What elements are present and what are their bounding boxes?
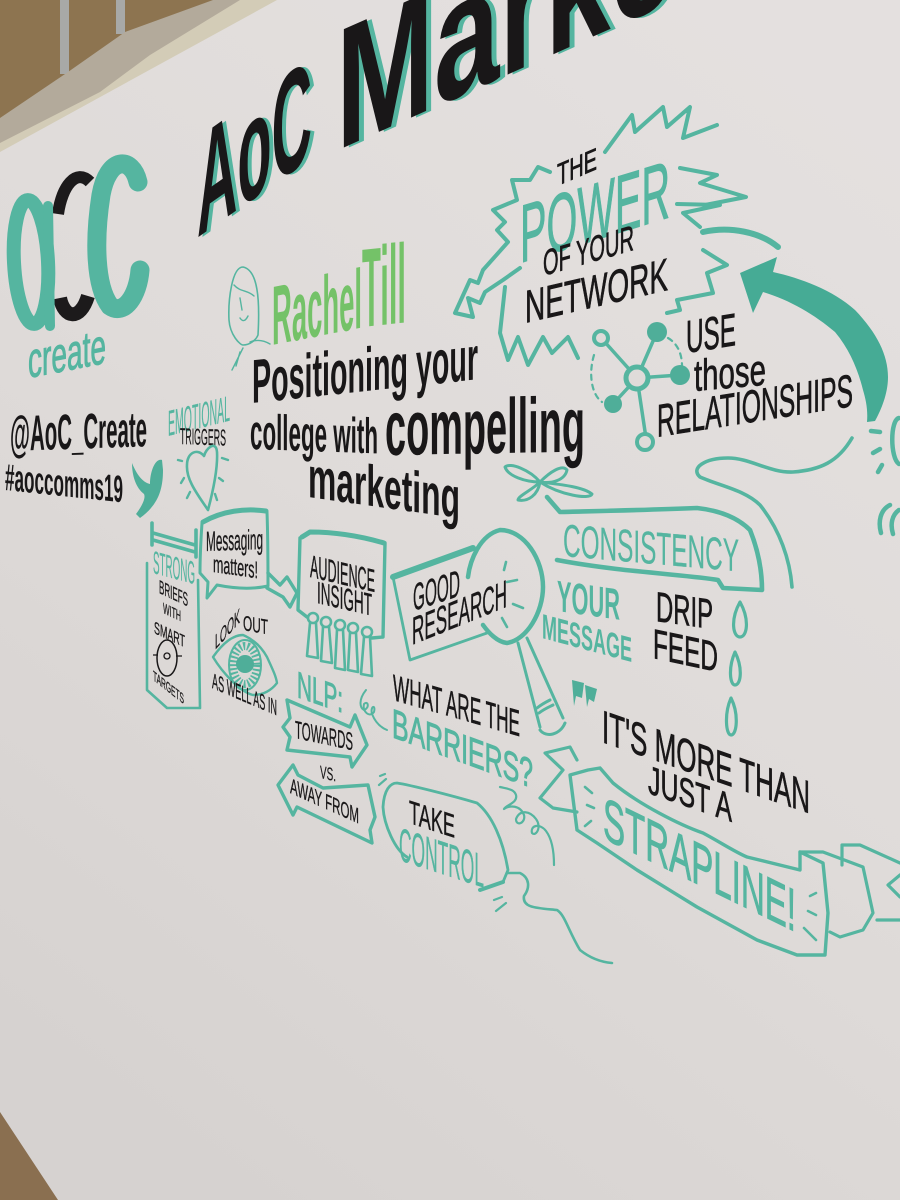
doodle loops right [500, 787, 554, 865]
power of your network burst: OF YOUR [543, 218, 634, 284]
panel: look out eye [212, 603, 277, 720]
arrow: towards: TOWARDS [295, 716, 353, 756]
panel: consistency banner [542, 497, 762, 735]
icon: water drops [726, 602, 746, 735]
logo letter c [97, 164, 140, 309]
callout: take control: TAKE [409, 794, 455, 846]
use those relationships [657, 303, 853, 447]
callout: take control [379, 774, 612, 963]
text: Messaging [206, 524, 263, 557]
panel: audience insight: INSIGHT [317, 575, 372, 623]
wall and window behind the paper [0, 0, 290, 170]
quote: it's more than just a strapline: JUST A [648, 757, 732, 831]
power of your network burst: POWER [520, 143, 670, 281]
arrow: towards [283, 700, 367, 767]
logo letter a [11, 199, 51, 326]
callout: messaging matters: matters! [213, 551, 258, 584]
sign post [152, 523, 196, 557]
power of your network burst: NETWORK [525, 249, 668, 333]
arrow: big teal curved arrow [740, 257, 888, 422]
talk headline: Positioning your [252, 324, 478, 417]
title [197, 0, 681, 269]
arrow: messaging to audience [267, 573, 297, 607]
text: compelling [385, 381, 585, 472]
panel: good research magnifier [393, 530, 565, 734]
panel: NLP towards vs away from: NLP: [297, 665, 343, 722]
speaker: Rachel Till [229, 221, 406, 370]
icon: heart [187, 446, 217, 510]
text: EMOTIONAL [168, 388, 230, 444]
icon: eye [213, 635, 277, 695]
doodle loops left [360, 690, 387, 730]
power of your network burst [455, 107, 778, 365]
panel: consistency banner: FEED [653, 620, 718, 681]
what are the barriers [360, 667, 554, 865]
text: STRONG [153, 545, 195, 591]
talk headline: college with [250, 404, 378, 464]
panel: consistency banner: CONSISTENCY [563, 514, 739, 581]
icon: network nodes [591, 322, 690, 450]
emotional triggers heart [168, 388, 230, 510]
bottom left wall corner [0, 1112, 58, 1200]
panel: good research magnifier: GOOD [413, 563, 460, 620]
arrow: away from: AWAY FROM [290, 773, 359, 828]
what are the barriers: BARRIERS? [392, 700, 533, 797]
lightbulb fragment at right edge [871, 418, 899, 534]
panel: good research magnifier: RESEARCH [412, 571, 507, 654]
icon: magnifying glass [468, 530, 565, 734]
icon: five audience figures [307, 613, 372, 676]
panel: strong briefs sign [147, 523, 200, 708]
panel: consistency banner: YOUR [557, 572, 620, 630]
panel: NLP towards vs away from [278, 665, 375, 843]
power of your network burst: THE [557, 141, 597, 193]
what are the barriers: WHAT ARE THE [393, 667, 520, 744]
panel: look out eye: LOOK [215, 603, 240, 655]
logo letter o [58, 177, 90, 314]
panel: NLP towards vs away from: VS. [320, 762, 336, 785]
callout: take control: CONTROL [399, 818, 484, 898]
connector swoosh to consistency [697, 438, 852, 587]
panel: strong briefs sign: TARGETS [153, 669, 184, 708]
icon: portrait sketch [229, 267, 270, 370]
panel: consistency banner: DRIP [656, 583, 713, 638]
text: @AoC_Create [10, 401, 147, 462]
panel: strong briefs sign: WITH [163, 601, 181, 625]
twitter handle and hashtag [5, 401, 147, 511]
panel: strong briefs sign: SMART [154, 618, 185, 651]
twitter handle and hashtag: #aoccomms19 [5, 457, 123, 511]
arrow: away from [278, 765, 375, 843]
panel: look out eye: OUT [243, 612, 268, 639]
panel: consistency banner: MESSAGE [542, 607, 632, 670]
text: AS WELL AS IN [212, 668, 277, 720]
text: Till [362, 221, 406, 351]
use those relationships: those [694, 346, 766, 401]
banner ribbon [540, 747, 900, 955]
icon: quotation marks [572, 680, 597, 707]
callout: messaging matters [200, 510, 268, 598]
text: AUDIENCE [310, 548, 375, 599]
talk headline [250, 324, 585, 531]
use those relationships: USE [686, 303, 736, 363]
talk headline: marketing [308, 445, 460, 531]
icon: twitter bird [132, 460, 163, 518]
create word: create [28, 317, 106, 389]
icon: target [153, 640, 182, 676]
icon: ribbon bow [505, 465, 592, 500]
text: TRIGGERS [180, 423, 226, 451]
speaker name [272, 221, 406, 363]
text: Rachel [272, 251, 362, 363]
quote: it's more than just a strapline [540, 680, 900, 955]
panel: strong briefs sign: BRIEFS [159, 577, 188, 611]
logo: aoc create [11, 164, 140, 389]
burst outline [455, 107, 746, 365]
panel: audience insight [298, 532, 385, 676]
tail squiggle [507, 873, 612, 963]
